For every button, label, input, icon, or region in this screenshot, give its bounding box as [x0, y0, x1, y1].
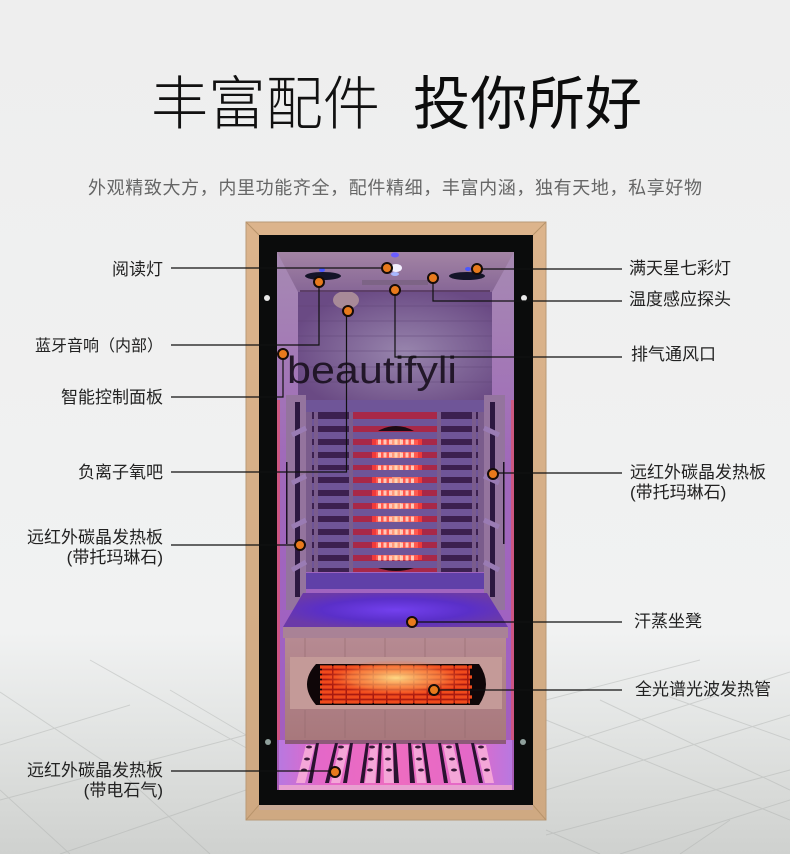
labels: right column: 温度感应探头: [629, 290, 731, 309]
uprights: [306, 412, 484, 572]
labels: left column: (带托玛琳石): [67, 548, 163, 567]
labels: left column: 远红外碳晶发热板: [27, 528, 163, 547]
back heater panel with slats: [306, 400, 484, 589]
labels: left column: 阅读灯: [112, 260, 163, 279]
interior side walls: [277, 252, 514, 790]
labels: left column: 负离子氧吧: [78, 463, 163, 482]
leader lines: [171, 268, 622, 771]
slats: [306, 400, 484, 568]
left side rack: [286, 395, 306, 610]
sauna bench: [283, 593, 508, 638]
title: [151, 72, 642, 137]
ceiling lights and speakers: [300, 252, 490, 309]
lower wall: [285, 638, 506, 740]
floor with stone strips: [279, 740, 512, 790]
screws: [264, 295, 527, 745]
right side rack: [484, 395, 505, 610]
labels: left column: [27, 260, 163, 800]
marker dots: [278, 263, 498, 777]
labels: right column: 满天星七彩灯: [629, 259, 731, 278]
back wall: [298, 292, 492, 402]
wall plank lines: [298, 306, 492, 382]
title: 投你所好: [413, 72, 642, 137]
black glass border: [259, 235, 533, 805]
labels: right column: 远红外碳晶发热板: [630, 463, 766, 482]
labels: left column: (带电石气): [84, 781, 163, 800]
labels: right column: 排气通风口: [631, 345, 716, 364]
labels: right column: 全光谱光波发热管: [635, 680, 771, 699]
labels: right column: [629, 259, 771, 699]
labels: left column: 远红外碳晶发热板: [27, 761, 163, 780]
watermark: beautifyli: [287, 350, 457, 392]
title: 丰富配件: [151, 72, 380, 137]
labels: left column: 蓝牙音响（内部）: [35, 337, 163, 355]
labels: right column: 汗蒸坐凳: [634, 612, 702, 631]
red centre panel: [352, 412, 438, 572]
sauna cabin photo: [246, 222, 546, 820]
labels: left column: 智能控制面板: [61, 388, 163, 407]
wooden frame: [246, 222, 546, 820]
labels: right column: (带托玛琳石): [630, 483, 726, 502]
full-spectrum heater tube: [290, 657, 502, 709]
ceiling: [277, 252, 514, 292]
subtitle: 外观精致大方，内里功能齐全，配件精细，丰富内涵，独有天地，私享好物: [88, 178, 702, 198]
